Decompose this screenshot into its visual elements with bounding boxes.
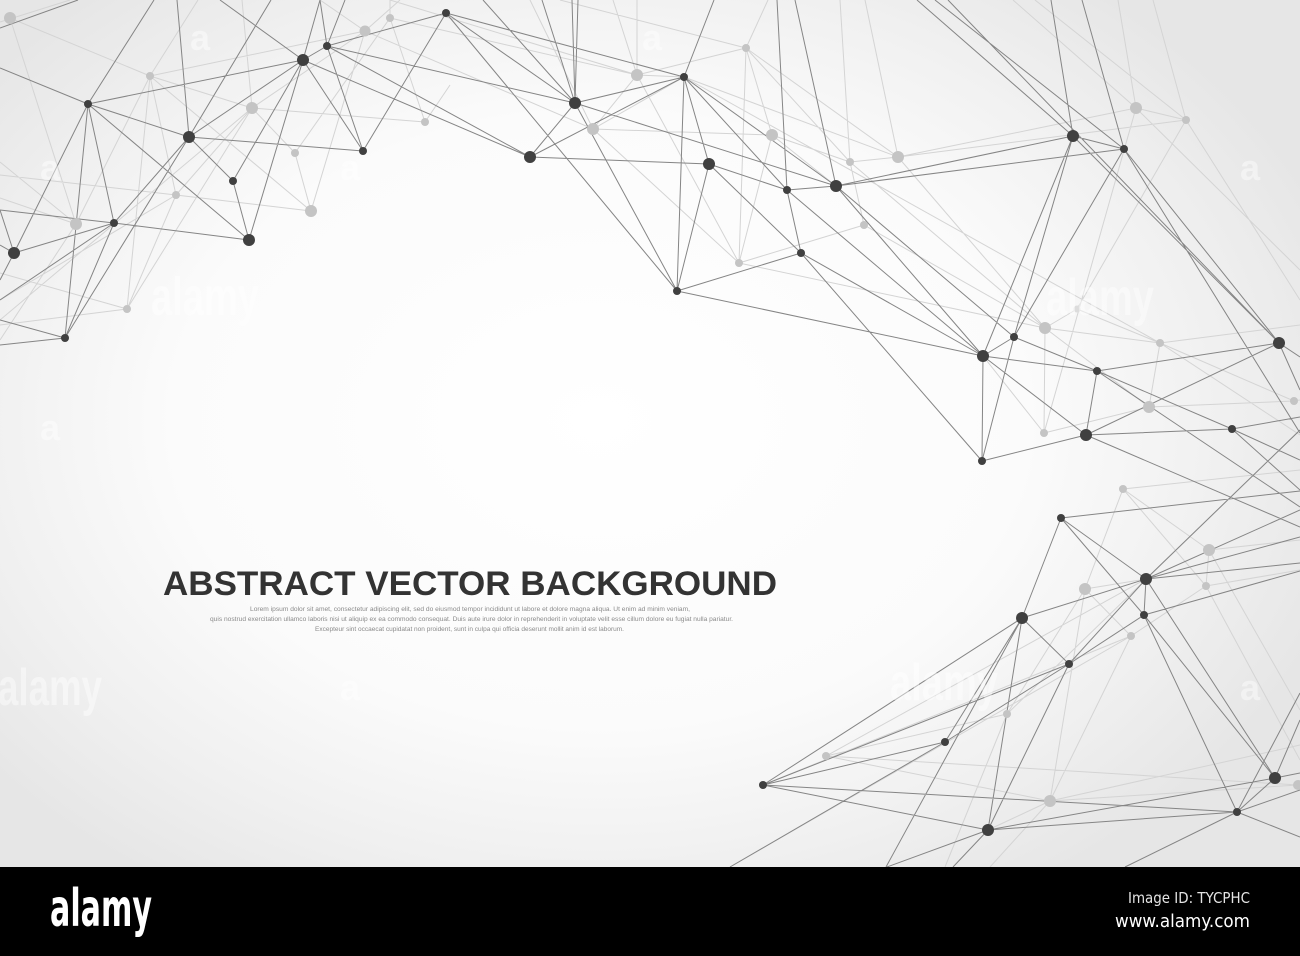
body text: Excepteur sint occaecat cupidatat non proident, sunt in culpa qui officia deserunt mollit anim id est laborum.	[315, 626, 624, 633]
watermarks: a	[1240, 667, 1261, 708]
watermarks: a	[40, 407, 61, 448]
watermarks: alamy	[890, 654, 998, 712]
watermarks: a	[1240, 147, 1261, 188]
watermarks: a	[340, 147, 361, 188]
watermarks: alamy	[0, 659, 102, 717]
body text	[210, 606, 733, 633]
watermarks: a	[190, 17, 211, 58]
image id: Image ID: TYCPHC	[1128, 889, 1250, 907]
watermarks	[0, 17, 1261, 717]
watermarks: a	[340, 667, 361, 708]
footer logo: alamy	[50, 879, 152, 939]
watermarks: a	[642, 17, 663, 58]
body text: quis nostrud exercitation ullamco laboris nisi ut aliquip ex ea commodo consequat. Duis aute irure dolor in reprehenderit in voluptate velit esse cillum dolore eu fugiat nulla pariatur.	[210, 616, 733, 623]
body text: Lorem ipsum dolor sit amet, consectetur adipiscing elit, sed do eiusmod tempor incididunt ut labore et dolore magna aliqua. Ut enim ad minim veniam,	[250, 606, 690, 613]
title: ABSTRACT VECTOR BACKGROUND	[163, 565, 777, 603]
watermarks: alamy	[151, 267, 259, 327]
watermarks: alamy	[1046, 269, 1154, 327]
watermarks: a	[40, 147, 61, 188]
footer bar	[0, 867, 1300, 956]
website: www.alamy.com	[1115, 911, 1250, 932]
